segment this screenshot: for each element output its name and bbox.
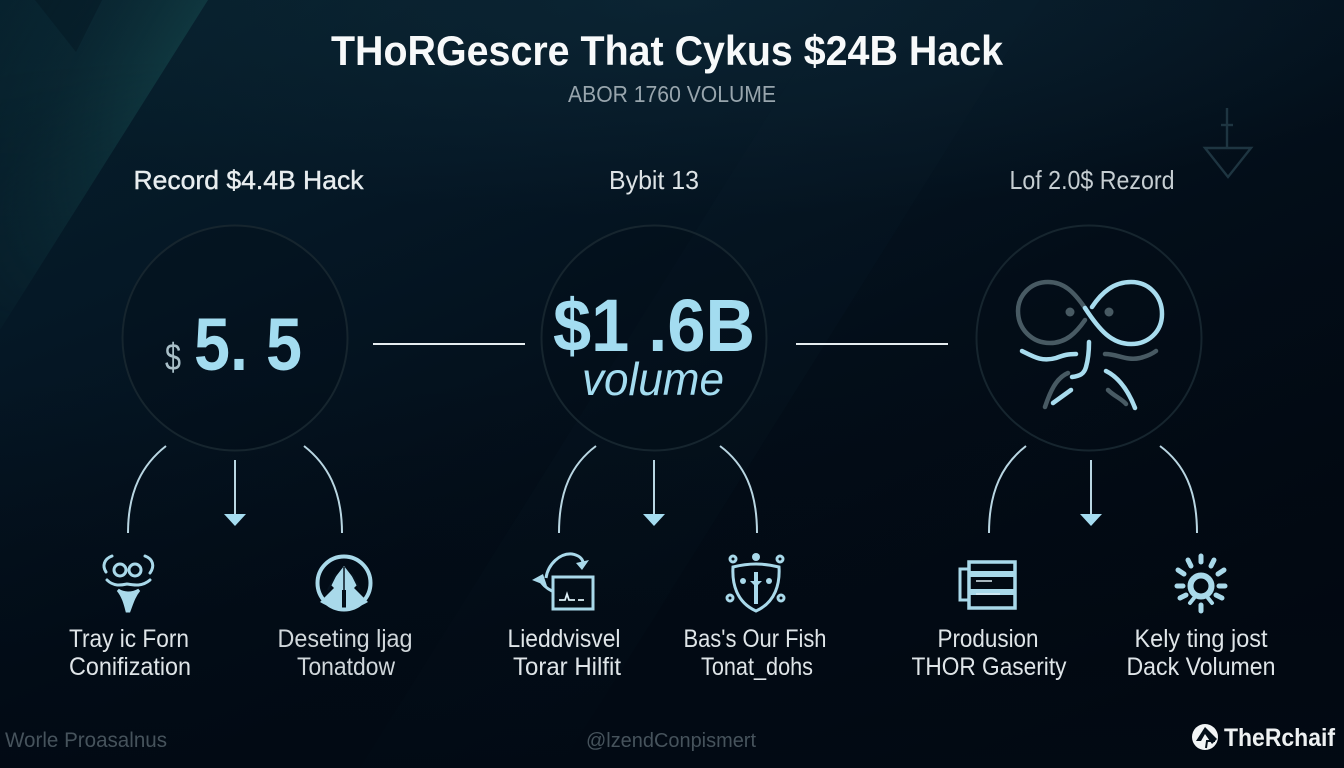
panel: left metric circle [122, 226, 348, 450]
label: Produsion THOR Gaserity [912, 625, 1067, 681]
footer: brand logo [1192, 724, 1336, 752]
icon: tree in circle [318, 556, 370, 610]
subtitle: ABOR 1760 VOLUME [568, 81, 776, 107]
arrows: left group [128, 446, 342, 533]
dollar sign: $ [165, 337, 181, 379]
label: Kely ting jost Dack Volumen: Kely ting jost [1134, 625, 1268, 653]
label: Deseting ljag Tonatdow: Deseting ljag [278, 625, 412, 653]
arrows: centre group [559, 446, 757, 533]
brand name: TheRchaif [1224, 724, 1336, 752]
label: Produsion THOR Gaserity: Produsion [938, 625, 1038, 653]
label: Deseting ljag Tonatdow: Tonatdow [297, 653, 396, 681]
label: Kely ting jost Dack Volumen [1126, 625, 1276, 681]
column heading: Record $4.4B Hack: Record $4.4B Hack [134, 165, 365, 195]
label: Bas's Our Fish Tonat_dohs: Bas's Our Fish [684, 625, 826, 653]
label: Tray ic Forn Conifization [69, 625, 191, 681]
metric label: volume: volume [582, 353, 724, 405]
label: Tray ic Forn Conifization: Conifization [69, 653, 191, 681]
label: Lieddvisvel Torar Hilfit: Lieddvisvel [508, 625, 620, 653]
label: Bas's Our Fish Tonat_dohs [684, 625, 826, 681]
column heading: Bybit 13: Bybit 13 [609, 165, 699, 195]
column heading: Lof 2.05 Record: Lof 2.0$ Rezord [1010, 165, 1174, 195]
connector: centre to right [796, 343, 948, 345]
icon: cycle and chart [532, 554, 593, 609]
label: Lieddvisvel Torar Hilfit: Torar Hilfit [513, 653, 621, 681]
icon: shield with dots [727, 553, 784, 611]
panel: right emblem circle [976, 226, 1202, 450]
label: Lieddvisvel Torar Hilfit [508, 625, 621, 681]
metric: $1.6B: $1 .6B [553, 284, 755, 367]
label: Kely ting jost Dack Volumen: Dack Volumen [1126, 653, 1276, 681]
title: THoRGescre That Cykus $24B Hack [331, 27, 1004, 74]
metric: 5.5: 5. 5 [194, 303, 302, 386]
icon: stacked document [960, 562, 1015, 608]
arrows: right group [989, 446, 1197, 533]
footer: centre note: @lzendConpismert [586, 730, 756, 752]
icon: gear sunburst [1177, 556, 1225, 611]
icon: horned mask [104, 556, 153, 611]
label: Tray ic Forn Conifization: Tray ic Forn [69, 625, 189, 653]
icon: infinity figure [1018, 282, 1162, 408]
icon: brand mark [1192, 724, 1218, 750]
panel: centre metric circle [542, 226, 766, 450]
footer: left note: Worle Proasalnus [5, 729, 167, 752]
connector: left to centre [373, 343, 525, 345]
label: Deseting ljag Tonatdow [278, 625, 412, 681]
label: Produsion THOR Gaserity: THOR Gaserity [912, 653, 1067, 681]
label: Bas's Our Fish Tonat_dohs: Tonat_dohs [701, 653, 813, 681]
icon: faint arrow emblem [1205, 108, 1251, 177]
